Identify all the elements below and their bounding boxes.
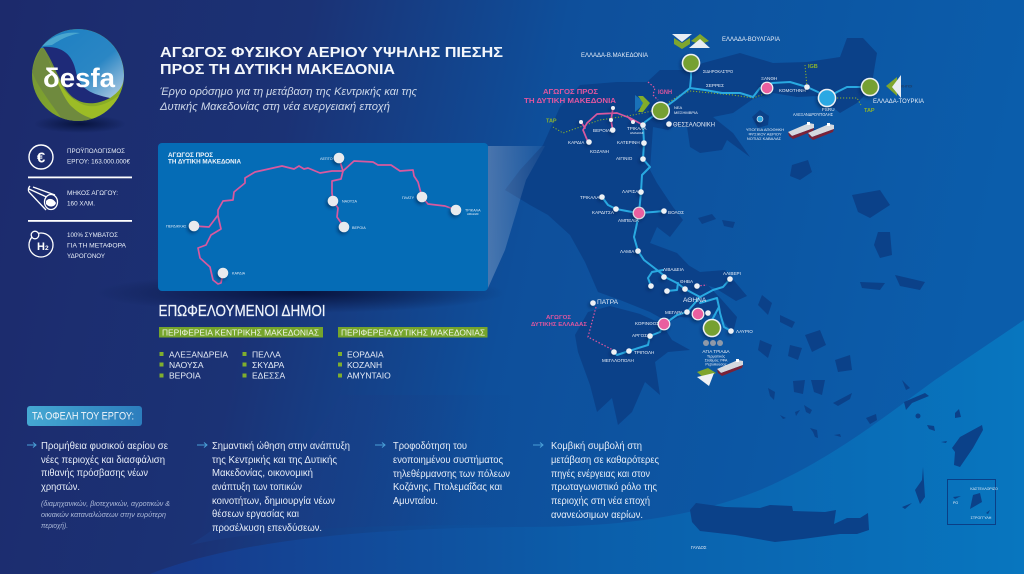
icon: hydrogen <box>29 231 53 257</box>
benefit 1: νέες περιοχές και διασφάλιση <box>41 454 165 466</box>
key facts sidebar <box>28 145 132 260</box>
benefit 4: Κομβική συμβολή στη <box>551 440 642 452</box>
title: ΠΡΟΣ ΤΗ ΔΥΤΙΚΗ ΜΑΚΕΔΟΝΙΑ <box>160 61 395 78</box>
map labels: ΒΟΛΟΣ <box>668 210 684 215</box>
benefit 1: πιθανής πρόσβασης νέων <box>41 467 148 479</box>
benefits heading button <box>27 406 142 426</box>
fact: budget: ΠΡΟΫΠΟΛΟΓΙΣΜΟΣ <box>67 147 125 155</box>
map labels: FSRU <box>822 107 835 112</box>
benefit 4: μετάβαση σε καθαρότερες <box>551 454 659 466</box>
benefit 2: Σημαντική ώθηση στην ανάπτυξη <box>212 440 350 452</box>
subtitle: Έργο ορόσημο για τη μετάβαση της Κεντρικής και της <box>160 86 417 98</box>
fact: budget <box>67 147 130 166</box>
panel heading: ΑΓΩΓΟΣ ΠΡΟΣ <box>168 152 213 159</box>
benefit 1: χρηστών. <box>41 481 80 493</box>
municipality list: ΣΚΥΔΡΑ <box>252 360 285 370</box>
map labels: ΝΕΑ <box>674 105 683 110</box>
title: ΑΓΩΓΟΣ ΦΥΣΙΚΟΥ ΑΕΡΙΟΥ ΥΨΗΛΗΣ ΠΙΕΣΗΣ <box>160 44 503 61</box>
municipality list: ΒΕΡΟΙΑ <box>169 370 201 380</box>
icon: hydrogen: H <box>37 241 45 253</box>
benefit 1: περιοχή). <box>41 521 68 530</box>
map labels: ΛΙΒΑΔΕΙΑ <box>663 267 685 272</box>
fact: hydrogen: ΥΔΡΟΓΟΝΟΥ <box>67 253 106 260</box>
route labels: ΠΕΡΔΙΚΚΑΣ <box>166 224 187 228</box>
map labels: pipelines: IGB <box>808 64 818 70</box>
benefit 2: προσέλκυση επενδύσεων. <box>212 522 322 534</box>
map labels: pipelines: ΤΗ ΔΥΤΙΚΗ ΜΑΚΕΔΟΝΙΑ <box>524 96 617 105</box>
benefit 4: πρωταγωνιστικό ρόλο της <box>551 481 657 493</box>
benefit 2 <box>197 440 350 534</box>
icon: euro: € <box>37 150 46 166</box>
map labels: ΑΛΕΞΑΝΔΡΟΥΠΟΛΗΣ <box>793 112 833 117</box>
benefit 1 <box>27 440 170 530</box>
panel heading <box>168 152 241 166</box>
benefit 3: τηλεθέρμανσης των πόλεων <box>393 468 510 480</box>
map labels: ΚΟΖΑΝΗ <box>590 149 609 154</box>
logo: desfa: δesfa <box>43 63 116 93</box>
icon: LNG ships <box>717 122 834 376</box>
benefit 2: Μακεδονίας, οικονομική <box>212 467 313 479</box>
icon: hydrogen: 2 <box>45 245 49 252</box>
icon: storage tanks <box>703 340 723 346</box>
heading: benefiting municipalities: ΕΠΩΦΕΛΟΥΜΕΝΟΙ ΔΗΜΟΙ <box>158 303 326 320</box>
map labels: ΑΛΙΒΕΡΙ <box>723 271 741 276</box>
municipality list: ΕΔΕΣΣΑ <box>252 370 286 380</box>
map labels: ΚΗΠΟΙ <box>901 84 912 88</box>
benefit 1: οικιακών καταναλώσεων στην ευρύτερη <box>41 510 166 519</box>
benefit 2: κοινοτήτων, δημιουργία νέων <box>212 495 335 507</box>
map labels: ΜΕΓΑΡΑ <box>665 310 684 315</box>
benefit 4: περιοχής στη νέα εποχή <box>551 495 650 507</box>
subtitle <box>159 86 417 113</box>
map labels: ΚΟΡΙΝΘΟΣ <box>635 321 659 326</box>
benefit 3: Τροφοδότηση του <box>393 440 467 452</box>
map labels: pipelines: ΑΓΩΓΟΣ <box>546 315 572 321</box>
icon: pipe <box>28 186 58 210</box>
map labels: Σταθμός ΥΦΑ <box>705 358 728 362</box>
map labels: ΤΡΙΠΟΛΗ <box>634 350 654 355</box>
map labels: pipelines: TAP <box>546 118 557 124</box>
map labels <box>568 37 925 550</box>
municipality list <box>160 350 391 380</box>
map labels: ΥΠΟΓΕΙΑ ΑΠΟΘΗΚΗ <box>746 127 784 132</box>
map labels: ΑΓΙΑ ΤΡΙΑΔΑ <box>702 349 731 354</box>
map labels: ΛΑΡΙΣΑ <box>622 189 639 194</box>
map labels: ΒΕΡΟΙΑ <box>593 128 611 133</box>
municipality list: ΑΛΕΞΑΝΔΡΕΙΑ <box>169 350 228 360</box>
map labels: ΕΛΛΑΔΑ-Β.ΜΑΚΕΔΟΝΙΑ <box>581 53 648 59</box>
inset box: Kastellorizo: ΣΤΡΟΓΓΥΛΗ <box>971 516 992 520</box>
panel: pipeline route map <box>158 143 488 291</box>
municipality list: ΝΑΟΥΣΑ <box>169 360 204 370</box>
map labels: ΞΑΝΘΗ <box>761 76 777 81</box>
map labels: ΛΑΜΙΑ <box>620 249 635 254</box>
map labels: ΤΡΙΚΑΛΑ <box>580 195 600 200</box>
map labels: pipelines: TAP <box>864 108 875 114</box>
inset box: Kastellorizo: ΚΑΣΤΕΛΛΟΡΙΖΟ <box>970 487 998 491</box>
route labels: ΗΜΑΘΙΑΣ <box>467 212 479 216</box>
route labels: ΤΡΙΚΑΛΑ <box>465 208 481 212</box>
map labels: pipelines <box>524 64 875 328</box>
map labels: ΜΕΓΑΛΟΠΟΛΗ <box>602 358 634 363</box>
municipality list: ΠΕΛΛΑ <box>252 350 281 360</box>
map labels: ΚΑΡΔΙΑ <box>568 140 585 145</box>
fact: hydrogen <box>67 232 127 260</box>
fact: budget: ΕΡΓΟΥ: 163.000.000€ <box>67 158 130 166</box>
benefit 2: θέσεων εργασίας και <box>212 508 300 520</box>
route labels: ΠΛΑΤΥ <box>402 196 415 200</box>
benefit 3: Κοζάνης, Πτολεμαΐδας και <box>393 481 503 493</box>
fact: hydrogen: ΓΙΑ ΤΗ ΜΕΤΑΦΟΡΑ <box>67 242 127 250</box>
map: pipeline network <box>553 63 870 355</box>
map labels: ΤΡΙΚΑΛΑ <box>627 126 647 131</box>
route labels <box>166 157 481 276</box>
map labels: pipelines: IGNH <box>658 90 672 96</box>
map labels: ΣΙΔΗΡΟΚΑΣΤΡΟ <box>703 69 733 74</box>
inset box: Kastellorizo: ΡΟ <box>953 501 958 505</box>
map labels: ΚΑΡΔΙΤΣΑ <box>592 210 615 215</box>
map labels: pipelines: ΑΓΩΓΟΣ ΠΡΟΣ <box>543 87 599 96</box>
subtitle: Δυτικής Μακεδονίας στη νέα ενεργειακή εποχή <box>159 101 390 113</box>
benefit 1: Προμήθεια φυσικού αερίου σε <box>41 440 168 452</box>
route labels: ΚΑΡΔΙΑ <box>232 272 246 276</box>
map labels: ΕΛΛΑΔΑ-ΒΟΥΛΓΑΡΙΑ <box>722 37 780 43</box>
map labels: ΜΕΣΗΜΒΡΙΑ <box>674 110 698 115</box>
map labels: ΕΛΛΑΔΑ-ΤΟΥΡΚΙΑ <box>873 98 925 105</box>
inset box: Kastellorizo <box>948 480 998 524</box>
map labels: ΘΗΒΑ <box>680 279 694 284</box>
map labels: ΗΜΑΘΙΑΣ <box>630 131 644 135</box>
map labels: ΘΕΣΣΑΛΟΝΙΚΗ <box>673 122 715 128</box>
map labels: ΠΑΤΡΑ <box>597 299 619 306</box>
route nodes <box>189 153 461 278</box>
benefits heading button: ΤΑ ΟΦΕΛΗ ΤΟΥ ΕΡΓΟΥ: <box>32 410 134 422</box>
map: land masses of Greece <box>505 38 983 542</box>
panel connector wedge <box>488 146 545 288</box>
map labels: ΑΘΗΝΑ <box>683 297 707 304</box>
benefit 4 <box>533 440 659 521</box>
route lines <box>194 158 456 284</box>
benefit 4: ανανεώσιμων αερίων. <box>551 509 643 521</box>
map labels: Ρεβυθούσας <box>705 362 727 366</box>
region tag: Central Macedonia: ΠΕΡΙΦΕΡΕΙΑ ΚΕΝΤΡΙΚΗΣ ΜΑΚΕΔΟΝΙΑΣ <box>162 328 319 338</box>
benefit 1: (διαμηχανικών, βιοτεχνικών, αγροτικών & <box>41 499 170 508</box>
benefit 3: ενοποιημένου συστήματος <box>393 454 503 466</box>
fact: hydrogen: 100% ΣΥΜΒΑΤΟΣ <box>67 232 118 239</box>
route labels: ΝΑΟΥΣΑ <box>342 200 358 204</box>
map: nodes and markers <box>579 54 879 355</box>
fact: length: 160 ΧΛΜ. <box>67 200 95 208</box>
fact: length <box>67 190 118 208</box>
map labels: ΑΜΠΕΛΙΑ <box>618 218 640 223</box>
benefit 2: της Κεντρικής και της Δυτικής <box>212 454 337 466</box>
title <box>160 44 503 78</box>
icon: border flow arrows <box>635 34 901 386</box>
benefit 3: Αμυνταίου. <box>393 495 438 507</box>
map labels: ΣΕΡΡΕΣ <box>706 83 724 88</box>
map labels: ΦΥΣΙΚΟΥ ΑΕΡΙΟΥ <box>748 132 782 136</box>
municipality list: ΕΟΡΔΑΙΑ <box>347 350 384 360</box>
region tag: Western Macedonia: ΠΕΡΙΦΕΡΕΙΑ ΔΥΤΙΚΗΣ ΜΑΚΕΔΟΝΙΑΣ <box>341 328 485 338</box>
map labels: ΑΡΓΟΣ <box>632 333 647 338</box>
map labels: ΚΟΜΟΤΗΝΗ <box>779 88 806 93</box>
map labels: ΑΙΓΙΝΙΟ <box>616 156 633 161</box>
municipality list: ΑΜΥΝΤΑΙΟ <box>347 370 391 380</box>
municipality list: ΚΟΖΑΝΗ <box>347 360 382 370</box>
map labels: ΓΑΥΔΟΣ <box>691 545 707 550</box>
benefit 2: ανάπτυξη των τοπικών <box>212 481 302 493</box>
map labels: pipelines: ΔΥΤΙΚΗΣ ΕΛΛΑΔΑΣ <box>531 322 588 328</box>
map labels: ΛΑΥΡΙΟ <box>736 329 753 334</box>
map labels: Τερματικός <box>707 354 725 358</box>
fact: length: ΜΗΚΟΣ ΑΓΩΓΟΥ: <box>67 190 118 197</box>
logo: desfa <box>30 28 126 133</box>
benefit 3 <box>375 440 510 507</box>
map labels: ΚΑΤΕΡΙΝΗ <box>617 140 640 145</box>
benefit 4: πηγές ενέργειας και στον <box>551 468 650 480</box>
map labels: ΝΟΤΙΑΣ ΚΑΒΑΛΑΣ <box>747 136 782 141</box>
route labels: ΒΕΡΟΙΑ <box>352 226 366 230</box>
route labels: ΛΕΠΤΟ <box>320 157 333 161</box>
panel heading: ΤΗ ΔΥΤΙΚΗ ΜΑΚΕΔΟΝΙΑ <box>168 158 241 166</box>
